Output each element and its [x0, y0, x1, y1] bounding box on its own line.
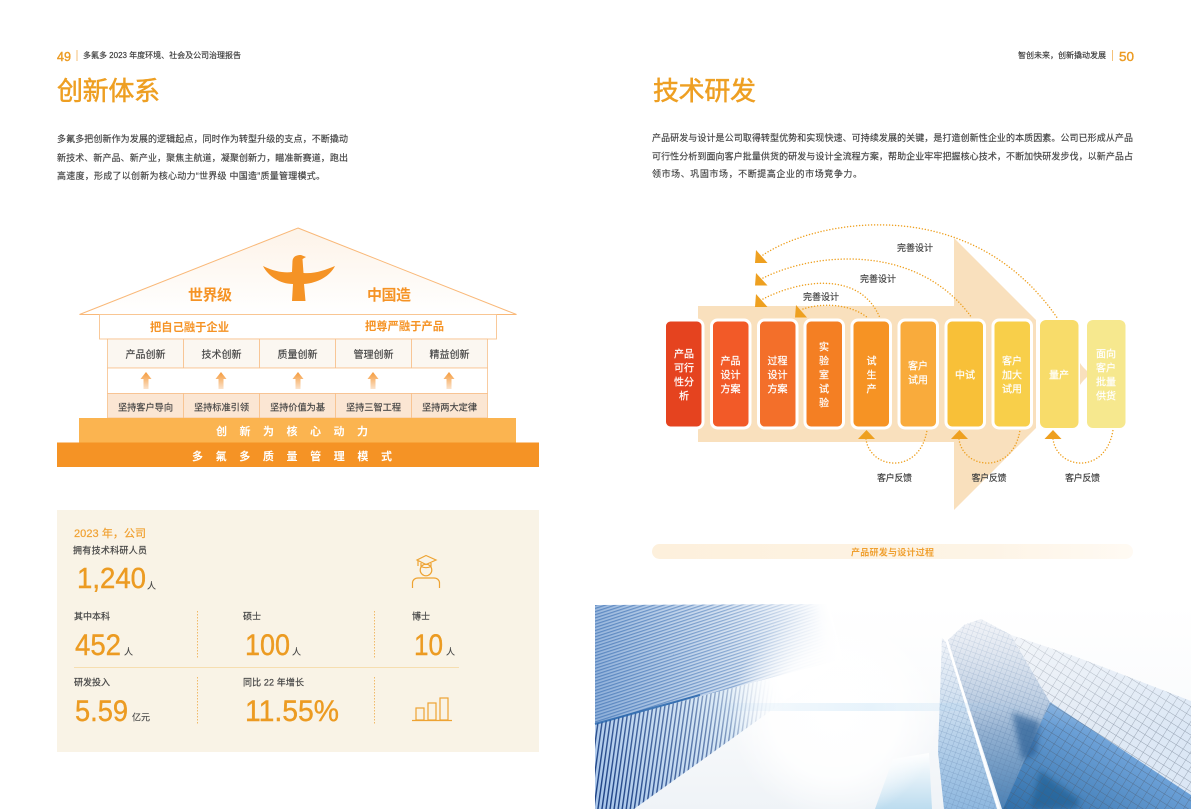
- innovation row: [108, 339, 488, 368]
- stat: researchers: 人: [147, 581, 156, 591]
- card: 产品设计方案: 方案: [720, 382, 740, 396]
- stat: researchers: 拥有技术科研人员: [73, 544, 147, 556]
- caption bar: [652, 544, 1133, 559]
- card: 客户加大试用: 加大: [1002, 368, 1022, 382]
- stat: growth: [243, 676, 339, 728]
- right intro text: 产品研发与设计是公司取得转型优势和实现快速、可持续发展的关键，是打造创新性企业的本质因素。公司已形成从产品: [652, 132, 1133, 143]
- innovation row: 技术创新: [202, 348, 242, 361]
- card: 产品可行性分析: 可行: [674, 362, 694, 374]
- roof label left: 世界级: [188, 286, 232, 304]
- card: 客户试用: [899, 320, 938, 428]
- feedback arcs: design improvement: [755, 225, 1058, 319]
- card: 中试: [946, 320, 984, 428]
- stat: master: 硕士: [243, 610, 261, 622]
- card: 过程设计方案: 过程: [768, 354, 788, 368]
- beam with slogans: 把尊严融于产品: [365, 319, 444, 333]
- title: 技术研发: 技术研发: [653, 76, 756, 106]
- photo: skyscrapers: [595, 604, 1191, 809]
- card: 量产: [1040, 320, 1078, 428]
- left intro text: 新技术、新产品、新产业，聚焦主航道，凝聚创新力，瞄准新赛道，跑出: [57, 152, 348, 163]
- principles row: 坚持标准引领: [194, 402, 249, 412]
- arrows row: [108, 368, 488, 394]
- card: 产品可行性分析: [664, 320, 703, 428]
- labels: 完善设计: 完善设计: [803, 291, 839, 302]
- labels: 完善设计: 完善设计: [897, 242, 933, 253]
- title: 创新体系: 创新体系: [57, 76, 160, 106]
- right tower: [938, 619, 1191, 809]
- stat: R&D investment: 研发投入: [74, 676, 110, 688]
- card: 面向客户批量供货: 批量: [1096, 376, 1116, 388]
- card: 试生产: 生: [866, 368, 876, 382]
- labels: 客户反馈: [877, 472, 1100, 483]
- right page header: 50: [1119, 49, 1134, 64]
- labels: 客户反馈: 客户反馈: [1065, 472, 1100, 483]
- card: 面向客户批量供货: 供货: [1096, 390, 1116, 402]
- card: 实验室试验: 实: [819, 340, 829, 354]
- left intro text: 多氟多把创新作为发展的逻辑起点，同时作为转型升级的支点，不断撬动: [57, 133, 348, 144]
- principles row: 坚持两大定律: [422, 402, 477, 412]
- card: 实验室试验: 验: [819, 396, 829, 410]
- stat: researchers: [73, 544, 156, 595]
- caption bar: 产品研发与设计过程: [851, 546, 934, 558]
- card: 试生产: 产: [866, 382, 876, 396]
- card: 面向客户批量供货: 客户: [1096, 362, 1116, 374]
- card: 面向客户批量供货: [1087, 320, 1126, 428]
- left page header: 49: [57, 49, 71, 64]
- panel heading: 2023 年，公司: [74, 526, 146, 540]
- card: 实验室试验: 验: [819, 354, 829, 368]
- stat: researchers: 1,240: [77, 563, 146, 595]
- roof label right: 中国造: [367, 287, 411, 304]
- card: 试生产: [852, 320, 890, 428]
- beam with slogans: [100, 314, 496, 339]
- card: 实验室试验: 试: [819, 382, 829, 396]
- card: 客户试用: 客户: [908, 360, 928, 372]
- card: 产品可行性分析: 产品: [674, 348, 694, 360]
- principles row: 坚持价值为基: [270, 402, 325, 412]
- stat: R&D investment: 亿元: [132, 712, 150, 722]
- left intro text: 高速度，形成了以创新为核心动力“世界级 中国造”质量管理模式。: [57, 170, 325, 181]
- right intro text: 领市场、巩固市场，不断提高企业的市场竞争力。: [652, 168, 862, 179]
- principles row: 坚持三智工程: [346, 402, 401, 412]
- card: 实验室试验: [805, 320, 844, 428]
- labels: 客户反馈: 客户反馈: [972, 472, 1006, 483]
- card: 中试: 中试: [955, 368, 975, 382]
- stat: bachelor: [74, 610, 133, 662]
- stat: doctor: [412, 610, 455, 662]
- card: 客户加大试用: 客户: [1002, 354, 1022, 368]
- stat: R&D investment: 5.59: [75, 695, 128, 728]
- innovation row: 质量创新: [278, 348, 318, 361]
- stat: growth: 11.55%: [245, 695, 339, 728]
- panel: 2023 statistics: [57, 510, 539, 752]
- left page header: 多氟多 2023 年度环境、社会及公司治理报告: [83, 50, 241, 60]
- card: 产品设计方案: 设计: [720, 368, 740, 382]
- base: quality management model: 多氟多质量管理模式: [192, 449, 392, 463]
- innovation row: 精益创新: [430, 348, 470, 361]
- right intro text: [652, 132, 1133, 179]
- house diagram: [57, 228, 539, 467]
- stat: master: 100: [245, 629, 290, 662]
- icon: graduate: [412, 556, 440, 588]
- stat: bachelor: 452: [75, 629, 121, 662]
- card: 量产: 量产: [1049, 368, 1069, 382]
- stat: doctor: 博士: [412, 610, 430, 622]
- light ray: [700, 703, 1040, 711]
- card: 产品可行性分析: 性分: [674, 376, 694, 388]
- innovation row: 产品创新: [126, 348, 166, 361]
- stat: master: 人: [292, 647, 301, 657]
- labels: 完善设计: 完善设计: [860, 273, 896, 284]
- right intro text: 可行性分析到面向客户批量供货的研发与设计全流程方案，帮助企业牢牢把握核心技术，不断加快研发步伐，以新产品占: [652, 150, 1133, 162]
- principles row: [108, 394, 488, 418]
- card: 产品可行性分析: 析: [679, 390, 689, 402]
- card: 过程设计方案: [758, 320, 797, 428]
- innovation row: 管理创新: [354, 348, 394, 361]
- card: 试生产: 试: [866, 354, 876, 368]
- feedback arcs: customer: [858, 430, 1113, 463]
- base: innovation driver: 创新为核心动力: [216, 424, 368, 438]
- base: innovation driver: [79, 418, 516, 442]
- base: quality management model: [57, 442, 539, 467]
- icon: bar chart: [412, 698, 452, 720]
- stat: master: [243, 610, 301, 662]
- right page header: 智创未来，创新撬动发展: [1018, 50, 1106, 60]
- principles row: 坚持客户导向: [118, 402, 173, 412]
- left tower: [595, 604, 843, 809]
- card: 过程设计方案: 方案: [768, 382, 788, 396]
- card: 客户加大试用: 试用: [1002, 382, 1022, 396]
- stat: bachelor: 人: [124, 647, 133, 657]
- right page header: [1018, 49, 1134, 64]
- beam with slogans: 把自己融于企业: [150, 320, 229, 334]
- card: 面向客户批量供货: 面向: [1096, 348, 1116, 360]
- labels: 客户反馈: 客户反馈: [877, 472, 912, 483]
- roof: [80, 228, 516, 314]
- stat: doctor: 10: [414, 629, 443, 662]
- left intro text: [57, 133, 348, 181]
- card: 产品设计方案: [712, 320, 750, 428]
- stat: R&D investment: [74, 676, 150, 728]
- stat: doctor: 人: [446, 647, 455, 657]
- labels: 完善设计: [803, 242, 933, 302]
- large arrow background: [698, 238, 1090, 510]
- central light glow: [730, 610, 940, 809]
- left page header: [57, 49, 241, 64]
- card: 产品设计方案: 产品: [720, 354, 740, 368]
- stat: growth: 同比 22 年增长: [243, 676, 304, 688]
- process flow diagram: [664, 225, 1126, 510]
- card: 客户加大试用: [993, 320, 1032, 428]
- icon: eagle logo: [263, 255, 335, 301]
- card: 实验室试验: 室: [819, 368, 829, 382]
- card: 客户试用: 试用: [908, 374, 928, 386]
- stat: bachelor: 其中本科: [74, 610, 110, 622]
- card: 过程设计方案: 设计: [768, 368, 788, 382]
- distant tower: [875, 753, 932, 809]
